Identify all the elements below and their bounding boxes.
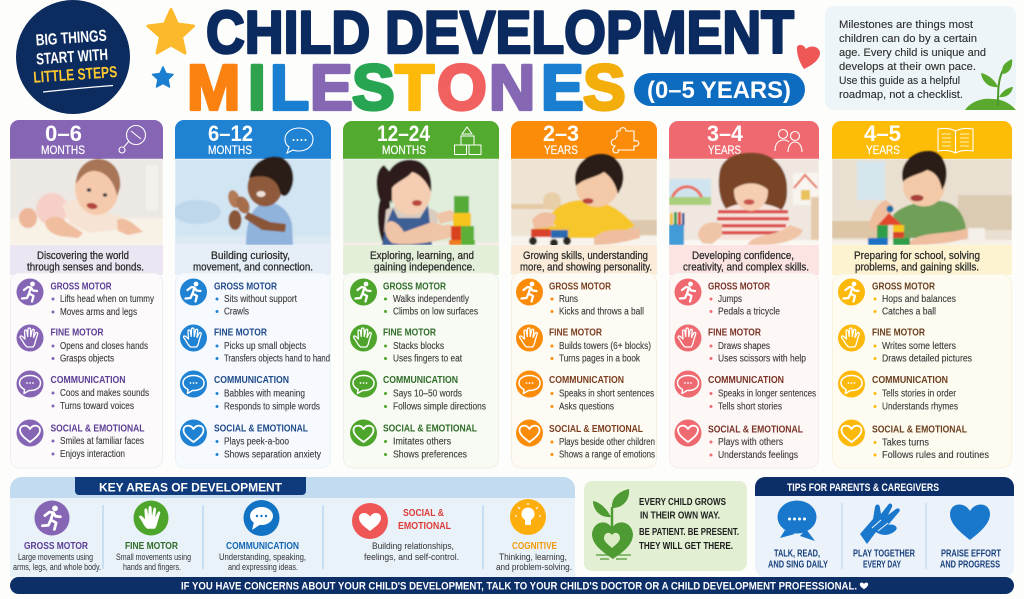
fine motor: Stacks blocks <box>393 341 444 352</box>
communication <box>350 370 486 412</box>
intro text box: age. Every child is unique and <box>839 47 986 59</box>
caption: Preparing for school, solving <box>854 250 980 262</box>
fine motor: Builds towers (6+ blocks) <box>559 341 651 352</box>
title: milestones: E <box>310 52 353 124</box>
intro text box: Use this guide as a helpful <box>839 75 960 87</box>
communication: Follows simple directions <box>393 402 486 412</box>
social and emotional: Understands feelings <box>718 450 798 461</box>
panel: every child grows: THEY WILL GET THERE. <box>639 541 733 552</box>
tips heading <box>755 477 1014 496</box>
social and emotional: SOCIAL & EMOTIONAL <box>214 424 308 434</box>
gross motor: Kicks and throws a ball <box>559 306 644 318</box>
fine motor area: FINE MOTOR <box>125 541 179 552</box>
title: milestones: M <box>187 52 240 124</box>
column header: YEARS <box>544 145 578 157</box>
gross motor: Climbs on low surfaces <box>393 306 478 318</box>
fine motor: Writes some letters <box>882 341 956 352</box>
column header: 0–6 <box>45 121 82 146</box>
title: milestones: E <box>541 52 584 124</box>
panel: 0–6 months <box>10 120 163 468</box>
fine motor: FINE MOTOR <box>50 328 104 338</box>
communication: COMMUNICATION <box>214 375 289 386</box>
social and emotional: Smiles at familiar faces <box>60 436 144 447</box>
caption: Exploring, learning, and <box>370 250 474 262</box>
caption: Discovering the world <box>37 250 129 262</box>
icon: large yellow star <box>148 10 194 53</box>
caption <box>832 245 1012 275</box>
social and emotional: Shows separation anxiety <box>224 450 321 460</box>
fine motor: Transfers objects hand to hand <box>224 354 330 364</box>
communication: COMMUNICATION <box>872 375 948 386</box>
social and emotional: SOCIAL & EMOTIONAL <box>872 424 967 436</box>
tip: talk read sing: TALK, READ, <box>774 548 820 560</box>
column header: 12–24 <box>377 121 431 146</box>
photo: boy with toy truck <box>511 154 657 247</box>
badge: big things start with little steps: BIG THINGS <box>35 28 107 50</box>
communication <box>516 370 654 412</box>
tip: praise effort: PRAISE EFFORT <box>941 548 1001 560</box>
gross motor: Sits without support <box>224 294 297 305</box>
title: child development: CHILD DEVELOPMENT <box>206 0 794 66</box>
icon: plant <box>965 59 1016 110</box>
gross motor area: Large movements using <box>18 552 93 562</box>
column header <box>669 121 819 159</box>
gross motor area: GROSS MOTOR <box>24 541 89 552</box>
title: milestones: T <box>395 52 434 124</box>
intro text box <box>825 6 1016 110</box>
social and emotional area: EMOTIONAL <box>398 521 451 532</box>
footer banner: IF YOU HAVE CONCERNS ABOUT YOUR CHILD'S DEVELOPMENT, TALK TO YOUR CHILD'S DOCTOR OR A CHILD DEVELOPMENT PROFESSIONAL. <box>181 580 857 592</box>
caption: Growing skills, understanding <box>523 250 648 262</box>
communication <box>180 370 320 412</box>
badge: big things start with little steps: LITTLE STEPS <box>33 64 118 87</box>
panel: 6–12 months <box>173 120 331 468</box>
gross motor: GROSS MOTOR <box>549 282 612 292</box>
caption <box>343 245 499 275</box>
tip: talk read sing <box>768 500 828 570</box>
cognitive area <box>496 499 572 572</box>
caption <box>175 245 331 275</box>
gross motor <box>180 278 297 318</box>
gross motor: Catches a ball <box>882 306 936 318</box>
icon: sprout with heart <box>592 489 633 559</box>
fine motor: Draws shapes <box>718 341 770 352</box>
social and emotional: Shows a range of emotions <box>559 450 655 460</box>
communication: Coos and makes sounds <box>60 388 149 399</box>
panel: every child grows <box>584 481 747 571</box>
fine motor: FINE MOTOR <box>214 328 268 338</box>
photo: toddler stacking blocks <box>343 159 499 245</box>
caption <box>10 245 163 275</box>
caption: movement, and connection. <box>193 262 313 274</box>
social and emotional area: feelings, and self-control. <box>364 552 459 562</box>
milestone list <box>176 273 330 468</box>
gross motor area: arms, legs, and whole body. <box>13 562 101 572</box>
fine motor <box>16 324 148 364</box>
fine motor area: hands and fingers. <box>123 562 181 572</box>
communication: Turns toward voices <box>60 401 134 412</box>
fine motor: Opens and closes hands <box>60 341 148 352</box>
communication <box>838 370 958 412</box>
heading tab: KEY AREAS OF DEVELOPMENT <box>99 480 283 494</box>
tip: praise effort <box>940 505 1001 570</box>
gross motor: Crawls <box>224 306 249 318</box>
column header: 6–12 <box>208 121 253 146</box>
communication area: COMMUNICATION <box>226 541 299 552</box>
caption: Building curiosity, <box>211 250 290 262</box>
panel: every child grows: EVERY CHILD GROWS <box>639 497 726 508</box>
intro text box: children can do by a certain <box>839 33 977 45</box>
communication: Babbles with meaning <box>224 388 305 400</box>
gross motor: Moves arms and legs <box>60 307 137 318</box>
title: milestones: I <box>248 52 266 124</box>
milestone list <box>832 274 1012 468</box>
icon: rattle <box>119 126 146 153</box>
communication: Tells short stories <box>718 402 782 412</box>
column header: YEARS <box>866 145 900 157</box>
fine motor <box>838 324 972 364</box>
gross motor: Hops and balances <box>882 294 956 305</box>
social and emotional <box>838 420 989 461</box>
panel: every child grows: IN THEIR OWN WAY. <box>640 510 720 522</box>
communication: Speaks in short sentences <box>559 388 654 400</box>
gross motor <box>350 278 478 318</box>
communication: COMMUNICATION <box>549 375 624 386</box>
photo: boy building with blocks <box>832 151 1012 245</box>
fine motor: Grasps objects <box>60 354 114 364</box>
communication: Tells stories in order <box>882 388 957 400</box>
column header: MONTHS <box>382 145 426 157</box>
caption <box>669 245 819 275</box>
social and emotional area: SOCIAL & <box>403 508 445 519</box>
badge: big things start with little steps <box>16 0 130 114</box>
panel: every child grows: BE PATIENT. BE PRESENT. <box>639 527 739 538</box>
footer banner <box>10 577 1014 594</box>
milestone list <box>512 273 656 468</box>
communication: Asks questions <box>559 402 614 412</box>
photo: baby on tummy <box>10 159 163 245</box>
social and emotional: Plays peek-a-boo <box>224 436 289 448</box>
gross motor: Pedals a tricycle <box>718 306 780 318</box>
communication: COMMUNICATION <box>50 375 126 386</box>
gross motor: Lifts head when on tummy <box>60 294 154 305</box>
tip: play together <box>853 504 916 570</box>
caption: creativity, and complex skills. <box>683 262 809 274</box>
communication area: and expressing ideas. <box>228 562 298 572</box>
intro text box: Milestones are things most <box>839 19 973 31</box>
gross motor: GROSS MOTOR <box>50 282 112 292</box>
column header: MONTHS <box>208 145 252 157</box>
icon: puzzle piece <box>611 128 639 153</box>
column header <box>343 121 499 159</box>
title: milestones: S <box>352 52 395 124</box>
age range pill: (0–5 YEARS) <box>647 77 791 104</box>
communication: COMMUNICATION <box>708 375 784 386</box>
icon: building blocks <box>454 127 481 154</box>
social and emotional: SOCIAL & EMOTIONAL <box>549 424 643 435</box>
column header: 4–5 <box>864 121 901 146</box>
heading tab <box>75 477 306 495</box>
gross motor <box>16 278 154 318</box>
gross motor <box>838 278 956 318</box>
fine motor <box>350 324 462 364</box>
fine motor <box>180 324 330 364</box>
social and emotional area: Building relationships, <box>372 541 454 551</box>
intro text box: develops at their own pace. <box>839 61 976 73</box>
social and emotional: Imitates others <box>393 436 451 448</box>
social and emotional: Plays beside other children <box>559 437 655 448</box>
social and emotional <box>674 420 803 461</box>
intro text box: roadmap, not a checklist. <box>839 89 963 101</box>
communication: COMMUNICATION <box>383 375 458 386</box>
column header <box>832 121 1012 159</box>
gross motor <box>516 278 644 318</box>
tip: play together: PLAY TOGETHER <box>853 548 916 560</box>
social and emotional <box>350 420 477 460</box>
milestone list <box>670 273 818 468</box>
fine motor: FINE MOTOR <box>708 328 762 338</box>
gross motor: GROSS MOTOR <box>708 282 771 292</box>
title: milestones: N <box>489 52 535 124</box>
icon: two people <box>775 130 802 152</box>
gross motor <box>674 278 780 318</box>
tips heading: TIPS FOR PARENTS & CAREGIVERS <box>787 482 939 494</box>
column header: MONTHS <box>41 145 85 157</box>
badge: big things start with little steps: START WITH <box>36 47 109 69</box>
fine motor: Picks up small objects <box>224 341 306 352</box>
social and emotional: Enjoys interaction <box>60 449 125 460</box>
panel: 4–5 years <box>832 121 1012 468</box>
fine motor area: Small movements using <box>116 552 191 562</box>
social and emotional <box>516 420 655 460</box>
caption: more, and showing personality. <box>520 262 652 274</box>
fine motor: Uses scissors with help <box>718 354 806 364</box>
fine motor <box>516 324 651 364</box>
social and emotional: SOCIAL & EMOTIONAL <box>708 424 803 436</box>
panel: 3–4 years <box>669 121 819 468</box>
caption: Developing confidence, <box>692 250 794 262</box>
gross motor: GROSS MOTOR <box>214 282 278 292</box>
column header: 2–3 <box>543 121 579 146</box>
caption: problems, and gaining skills. <box>855 262 979 274</box>
column header: 3–4 <box>707 121 744 146</box>
communication <box>16 370 149 412</box>
fine motor: Draws detailed pictures <box>882 354 972 364</box>
gross motor: Walks independently <box>393 294 469 305</box>
social and emotional: Takes turns <box>882 438 929 448</box>
caption <box>511 245 657 275</box>
caption: through senses and bonds. <box>27 262 144 274</box>
social and emotional: SOCIAL & EMOTIONAL <box>50 424 144 434</box>
icon: red heart <box>797 45 820 69</box>
fine motor: Turns pages in a book <box>559 354 640 364</box>
panel: 2–3 years <box>511 121 657 468</box>
fine motor area <box>116 500 191 572</box>
communication: Speaks in longer sentences <box>718 388 816 400</box>
photo: girl drawing <box>669 153 819 245</box>
panel: 12–24 months <box>343 121 499 468</box>
cognitive area: and problem-solving. <box>496 562 572 572</box>
social and emotional: Follows rules and routines <box>882 450 989 461</box>
photo: clapping baby <box>173 157 331 245</box>
social and emotional <box>16 420 144 460</box>
panel: tips for parents and caregivers <box>755 477 1014 577</box>
milestone list <box>10 273 162 468</box>
communication area <box>219 500 306 572</box>
tip: play together: EVERY DAY <box>863 560 901 570</box>
title: milestones: S <box>583 52 626 124</box>
gross motor: Runs <box>559 294 578 305</box>
column header: YEARS <box>708 145 741 157</box>
fine motor <box>674 324 806 364</box>
fine motor: Uses fingers to eat <box>393 354 462 364</box>
icon: speech bubble <box>285 128 313 153</box>
communication <box>674 370 816 412</box>
social and emotional: Shows preferences <box>393 450 467 460</box>
panel: key areas of development <box>10 477 575 577</box>
tip: praise effort: AND PROGRESS <box>940 560 1000 570</box>
cognitive area: Thinking, learning, <box>499 552 567 562</box>
cognitive area: COGNITIVE <box>512 541 557 552</box>
icon: open book <box>938 128 973 153</box>
social and emotional area <box>352 503 459 562</box>
column header <box>511 121 657 159</box>
age range pill <box>634 73 805 106</box>
icon: small blue star <box>152 67 173 87</box>
gross motor: GROSS MOTOR <box>872 282 936 292</box>
title: milestones: L <box>270 52 309 124</box>
communication: Understands rhymes <box>882 402 958 412</box>
caption: gaining independence. <box>374 262 475 274</box>
tip: talk read sing: AND SING DAILY <box>768 560 828 570</box>
communication: Says 10–50 words <box>393 388 462 400</box>
fine motor: FINE MOTOR <box>549 328 603 338</box>
gross motor: GROSS MOTOR <box>383 282 447 292</box>
communication: Responds to simple words <box>224 402 320 412</box>
communication area: Understanding, speaking, <box>219 552 306 562</box>
gross motor: Jumps <box>718 294 742 305</box>
social and emotional: SOCIAL & EMOTIONAL <box>383 424 477 434</box>
fine motor: FINE MOTOR <box>383 328 437 338</box>
milestone list <box>344 273 498 468</box>
social and emotional: Plays with others <box>718 437 783 448</box>
column header <box>10 120 163 159</box>
fine motor: FINE MOTOR <box>872 328 926 338</box>
title: milestones: O <box>437 52 487 124</box>
social and emotional <box>180 420 321 460</box>
gross motor area <box>13 500 101 572</box>
column header <box>175 120 331 159</box>
